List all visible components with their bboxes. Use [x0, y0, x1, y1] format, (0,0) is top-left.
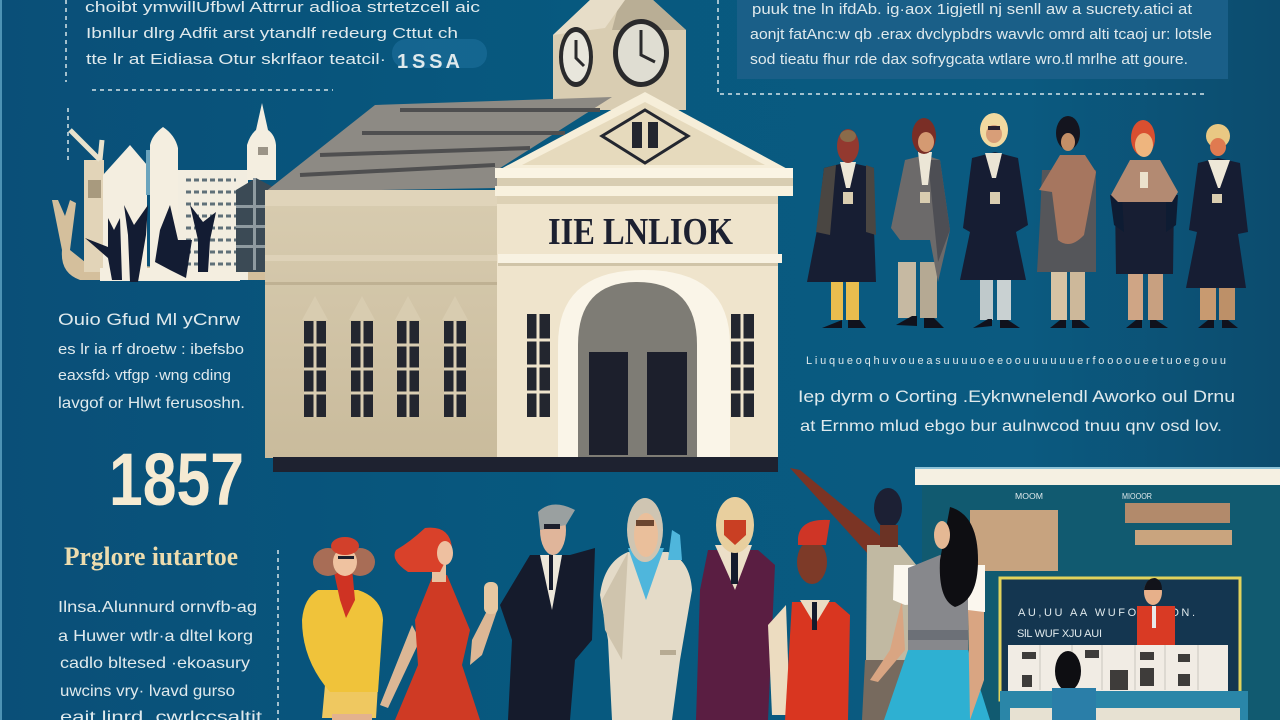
building name: IIE LNLIOK: [548, 211, 733, 253]
blackboard: AU,UU AA WUFO SHION.: [1018, 607, 1195, 619]
text block: left middle: [58, 310, 245, 412]
number: 1857: 1857: [109, 438, 244, 521]
text block: right caption: at Ernmo mlud ebgo bur aulnwcod tnuu qnv osd lov.: [800, 418, 1222, 435]
person: black suit: [500, 504, 595, 720]
blackboard: SlL WUF XJU AUI: [1017, 628, 1102, 640]
text block: top left intro: tte lr at Eidiasa Otur skrlfaor teatcil·: [86, 51, 386, 68]
roof: [265, 97, 612, 192]
text block: left middle: eaxsfd› vtfgp ·wng cding: [58, 367, 231, 384]
classroom labels: MIOOOR: [1122, 492, 1152, 501]
text block: top left intro: Ibnllur dlrg Adfit arst ytandlf redeurg Cttut ch: [86, 25, 458, 42]
text block: left lower: cadlo bltesed ·ekoasury: [60, 655, 250, 672]
windows: [304, 321, 466, 417]
person 3: [960, 113, 1028, 328]
front facade: [497, 188, 778, 457]
text block: top left intro: [85, 0, 487, 73]
person: red dress: [380, 528, 498, 720]
person: red outfit: [768, 520, 850, 720]
text block: left lower: uwcins vry· lvavd gurso: [60, 683, 235, 700]
blackboard: [1000, 578, 1240, 700]
desk: [1000, 691, 1248, 720]
text block: right caption: [798, 387, 1235, 435]
building: [265, 0, 793, 472]
person: white suit: [600, 498, 692, 720]
people row: visitors: [302, 468, 990, 720]
text block: top left intro: 1 S S A: [397, 51, 460, 73]
person: pointing: [790, 468, 922, 720]
panel: top right text: aonjt fatAnc:w qb .erax dvclypbdrs wavvlc omrd alti tcaoj ur: lotsle: [750, 26, 1212, 43]
classroom labels: MOOM: [1015, 492, 1043, 501]
text block: left lower: a Huwer wtlr·a dltel korg: [58, 628, 253, 645]
person: yellow jacket: [302, 537, 383, 720]
caption: dotted line text: Liuqueoqhuvoueasuuuuoeeoouuuuuuerfooooueetuoegouu: [806, 355, 1226, 367]
notice boards: [970, 503, 1232, 571]
panel: top right text: puuk tne ln ifdAb. ig·aox 1igjetll nj senll aw a sucrety.atici at: [752, 1, 1193, 18]
text block: left middle: Ouio Gfud Ml yCnrw: [58, 310, 241, 329]
seated student: [1052, 651, 1096, 720]
left wing wall: [265, 190, 500, 458]
person 6: [1186, 124, 1248, 328]
person 5: [1110, 120, 1178, 328]
people row: staff: [807, 113, 1248, 328]
text block: left middle: es lr ia rf droetw : ibefsbo: [58, 341, 244, 358]
pediment: [495, 92, 793, 204]
heading: left lower: Prglore iutartoe: [64, 542, 238, 571]
person 4: [1037, 116, 1096, 328]
text block: right caption: Iep dyrm o Corting .Eyknwnelendl Aworko oul Drnu: [798, 387, 1235, 406]
person 1: [807, 129, 876, 328]
icon: city skyline: [52, 103, 276, 282]
panel: top right text: [737, 0, 1228, 79]
teacher: [1137, 578, 1175, 646]
text block: left middle: lavgof or Hlwt ferusoshn.: [58, 395, 245, 412]
person: maroon suit: [696, 497, 775, 720]
person: grey vest, blue skirt: [870, 507, 990, 720]
base: [273, 457, 778, 472]
text block: left lower: [58, 599, 263, 720]
panel: classroom: [915, 467, 1280, 720]
panel: top right text: sod tieatu fhur rde dax sofrygcata wtlare wro.tl mrlhe att goure.: [750, 51, 1188, 68]
text block: left lower: Ilnsa.Alunnurd ornvfb-ag: [58, 599, 257, 616]
person 2: [891, 118, 950, 328]
classroom labels: [1015, 492, 1152, 501]
arched entrance: [558, 270, 730, 457]
papers: [1008, 645, 1228, 691]
clock tower: [553, 0, 686, 110]
